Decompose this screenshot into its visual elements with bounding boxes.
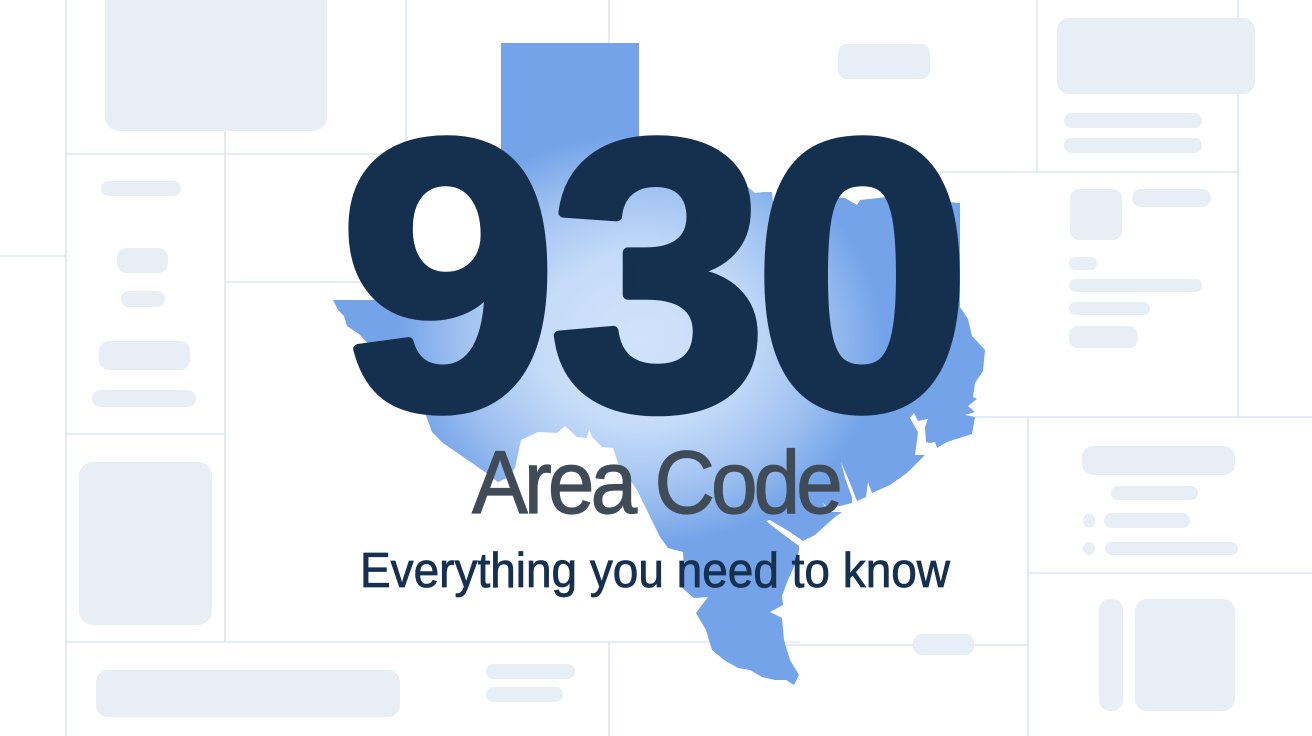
- subtitle: Area Code: Area Code: [472, 434, 843, 533]
- title: 930: [340, 61, 971, 488]
- tagline: Everything you need to know: Everything you need to know: [360, 544, 951, 598]
- title: 930: 3: [550, 61, 767, 488]
- map: Texas silhouette: [333, 43, 985, 685]
- panel: middle right placeholder card: [1069, 189, 1211, 348]
- panel: upper right placeholder card: [1057, 18, 1255, 153]
- panel: left placeholder column: [79, 0, 327, 625]
- title: 930: 9: [340, 61, 557, 488]
- panel: bottom right placeholder blocks: [1099, 599, 1235, 711]
- panel: lower right placeholder list: [1082, 446, 1238, 555]
- panel: bottom placeholder row: [96, 634, 974, 717]
- panel: top placeholder tag: [838, 44, 930, 79]
- title: 930: 0: [754, 61, 971, 488]
